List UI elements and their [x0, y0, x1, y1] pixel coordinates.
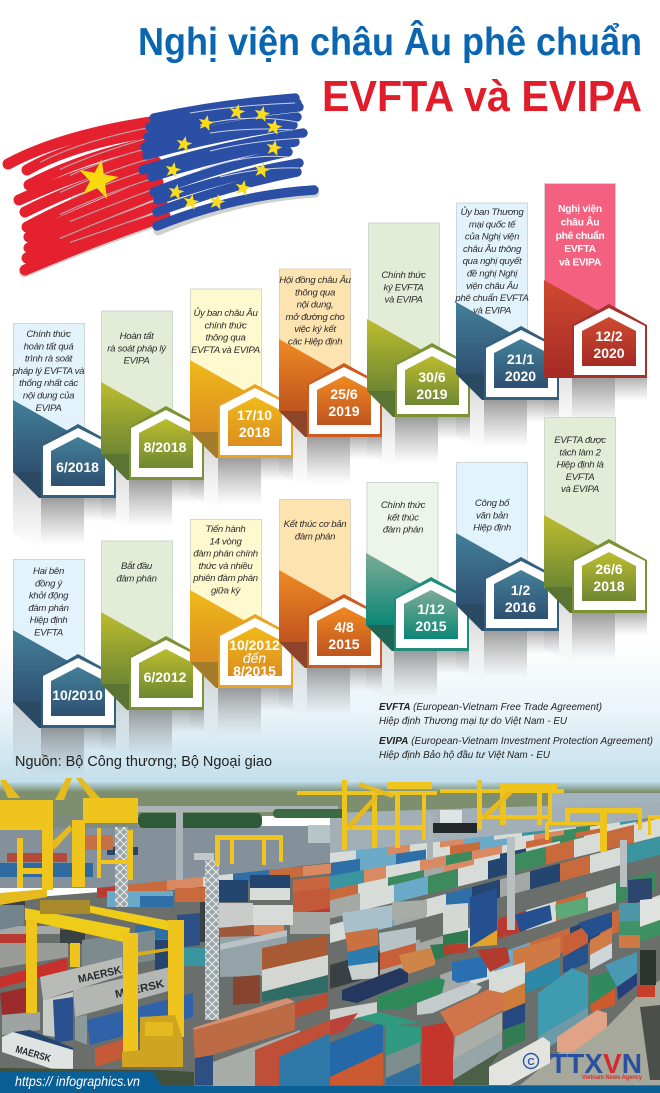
title	[138, 20, 642, 121]
timeline card: 25/6/2019	[279, 269, 382, 437]
card date: 10/2012	[229, 637, 280, 653]
card description: mở đường cho	[286, 312, 345, 323]
TTXVN logo: Vietnam News Agency	[582, 1075, 643, 1081]
card description: phiên đàm phán	[192, 573, 258, 584]
card date: 2015	[415, 618, 447, 634]
MAERSK containers: MAERSK	[14, 1044, 52, 1065]
timeline card: 1/2/2016	[456, 462, 559, 631]
card house badge	[307, 363, 382, 437]
card date: 2015	[328, 636, 360, 652]
card description: EVFTA được	[554, 435, 606, 446]
card description: nội dung của	[23, 390, 74, 402]
card description: và EVIPA	[473, 305, 511, 316]
timeline card: 8/2018	[101, 311, 204, 480]
timeline card: 1/12/2015	[366, 482, 469, 651]
card description: thông qua	[295, 287, 335, 298]
card date: 2016	[505, 599, 536, 615]
card description: các Hiệp định	[288, 336, 342, 348]
title line 2: EVFTA và EVIPA	[322, 72, 642, 121]
card house badge	[41, 654, 116, 728]
card date: 6/2012	[144, 669, 187, 685]
card date: 2020	[593, 345, 625, 361]
timeline card: 6/2012	[101, 541, 204, 710]
container yard base	[0, 826, 660, 1086]
card date: 25/6	[330, 386, 358, 402]
blue brushstrokes	[143, 98, 314, 226]
card description: EVFTA	[34, 628, 63, 638]
card house badge	[41, 424, 116, 498]
card house badge	[572, 304, 647, 378]
card date: 2018	[593, 578, 625, 594]
card house badge	[129, 406, 204, 480]
foreground gantry crane	[25, 900, 184, 1067]
card ribbon	[13, 630, 84, 728]
card description: và EVIPA	[559, 258, 602, 269]
card description: Ủy ban Thương	[461, 206, 524, 218]
timeline card: 10/2010	[13, 560, 116, 728]
timeline card: 26/6/2018	[544, 418, 647, 613]
upper left crane	[0, 778, 138, 905]
photo: container port	[0, 778, 660, 1086]
card description: 14 vòng	[209, 536, 242, 547]
card date: 12/2	[595, 328, 623, 344]
background container rows	[0, 816, 660, 997]
red brushstrokes	[8, 122, 165, 270]
card ribbon	[279, 339, 350, 437]
card description: Hiệp định	[30, 615, 67, 626]
timeline card: 30/6/2019	[367, 223, 470, 417]
footer bar with website	[0, 1072, 660, 1093]
card date: 1/12	[417, 601, 445, 617]
card ribbon	[544, 280, 615, 378]
card date: 8/2015	[233, 663, 276, 679]
source note: Nguồn: Bộ Công thương; Bộ Ngoại giao	[15, 753, 272, 770]
card description: đàm phán	[28, 603, 69, 614]
card description: EVFTA	[564, 244, 597, 255]
card description: châu Âu thông	[463, 244, 522, 255]
legend: abbreviations: Hiệp định Bảo hộ đầu tư Việt Nam - EU	[379, 749, 550, 761]
timeline card: 4/8/2015	[279, 500, 382, 668]
timeline card: 17/10/2018	[190, 289, 293, 458]
card description: kết thúc	[387, 512, 419, 523]
card house badge	[395, 343, 470, 417]
card ribbon	[366, 553, 437, 651]
card ribbon	[101, 382, 172, 480]
card date: 8/2018	[144, 439, 187, 455]
card description: nội dung,	[297, 300, 333, 311]
card date: 4/8	[334, 619, 354, 635]
card description: và EVIPA	[385, 295, 422, 306]
card description: thức và nhiều	[199, 561, 253, 572]
timeline card: 12/2/2020 highlighted	[544, 184, 647, 378]
card ribbon	[190, 590, 261, 688]
card description: đàm phán	[383, 525, 423, 536]
card description: Hiệp định là	[556, 460, 604, 471]
foreground containers	[193, 950, 660, 1086]
MAERSK containers: MAERSK	[114, 978, 165, 1001]
card ribbon	[190, 360, 261, 458]
card description: Hiệp định	[473, 523, 511, 534]
yellow cranes	[0, 778, 660, 1067]
card description: tách làm 2	[559, 447, 602, 458]
dark ground and grass	[0, 1068, 194, 1086]
card house badge	[484, 557, 559, 631]
legend: abbreviations	[379, 701, 653, 761]
page background	[0, 640, 660, 800]
card house badge	[218, 614, 293, 688]
card description: Tiến hành	[206, 524, 245, 535]
card description: Chính thức	[381, 500, 426, 511]
card house badge	[572, 539, 647, 613]
card description: mại quốc tế	[469, 219, 516, 230]
card description: Nghị viện	[558, 204, 602, 215]
card description: châu Âu	[561, 215, 599, 228]
card description: việc ký kết	[294, 324, 336, 335]
MAERSK containers: MAERSK	[77, 964, 123, 986]
card ribbon	[13, 400, 84, 498]
card date: 10/2010	[52, 687, 103, 703]
card description: Chính thức	[381, 270, 426, 281]
card description: đề nghị Nghị	[467, 268, 518, 280]
card description: giữa kỳ	[211, 586, 242, 596]
card description: EVIPA	[35, 403, 62, 414]
card description: đồng ý	[35, 578, 64, 589]
card description: văn bản	[476, 510, 508, 521]
legend: abbreviations: EVIPA (European-Vietnam Investment Protection Agreement)	[379, 735, 653, 747]
lattice lighting towers	[115, 812, 627, 1020]
card description: Hai bên	[33, 566, 64, 577]
mid yard containers	[0, 878, 660, 1024]
timeline card: 10/2012 to 8/2015	[190, 520, 293, 688]
card date: 2020	[505, 368, 536, 384]
card ribbon	[101, 612, 172, 710]
icon: yellow star of Vietnam flag	[80, 159, 119, 199]
card date: 1/2	[511, 582, 530, 598]
card description: EVFTA và EVIPA	[191, 345, 260, 356]
card house badge	[394, 577, 469, 651]
card ribbon	[544, 515, 615, 613]
card description: EVIPA	[123, 356, 150, 367]
timeline card: 21/1/2020	[454, 203, 559, 400]
shadows under timeline cards	[13, 352, 647, 779]
card description: Chính thức	[26, 329, 71, 340]
card date: 26/6	[595, 561, 623, 577]
MAERSK containers	[2, 957, 193, 1070]
card description: đàm phán chính	[193, 549, 258, 560]
card description: Bắt đầu	[121, 561, 153, 572]
card description: đàm phán	[295, 531, 335, 542]
card ribbon	[456, 533, 527, 631]
card description: thông qua	[206, 333, 245, 344]
card description: Hội đồng châu Âu	[279, 275, 352, 286]
card description: ký EVFTA	[383, 282, 424, 293]
card description: viện châu Âu	[466, 281, 519, 292]
card description: Kết thúc cơ bản	[284, 519, 346, 530]
card description: thống nhất các	[19, 378, 78, 389]
left yard rows	[0, 863, 331, 970]
card description: trình rà soát	[25, 354, 73, 365]
card description: chính thức	[204, 320, 247, 331]
card date: đến	[243, 650, 266, 666]
land and water	[0, 782, 660, 888]
card date: 2019	[416, 386, 448, 402]
card ribbon	[456, 302, 527, 400]
TTXVN logo: TTXVN	[550, 1048, 642, 1079]
card date: 2019	[328, 403, 360, 419]
card description: và EVIPA	[561, 484, 599, 495]
card description: Công bố	[475, 498, 511, 509]
card date: 30/6	[418, 369, 446, 385]
card description: phê chuẩn EVFTA	[454, 293, 529, 304]
card description: phê chuẩn	[556, 230, 604, 242]
card house badge	[129, 636, 204, 710]
card date: 21/1	[507, 351, 534, 367]
TTXVN logo: C	[527, 1057, 535, 1068]
legend: abbreviations: EVFTA (European-Vietnam Free Trade Agreement)	[379, 701, 602, 713]
card date: 6/2018	[56, 459, 99, 475]
website address: https:// infographics.vn	[15, 1073, 140, 1089]
right quay cranes	[297, 780, 660, 852]
icon: Vietnam and EU brushstroke flag	[8, 98, 315, 273]
card description: hoàn tất quá	[24, 341, 74, 352]
legend: abbreviations: Hiệp định Thương mại tự do Việt Nam - EU	[379, 715, 567, 727]
card description: Ủy ban châu Âu	[193, 307, 258, 319]
card description: pháp lý EVFTA và	[12, 366, 85, 377]
card house badge	[307, 594, 382, 668]
far ships	[0, 810, 477, 877]
timeline card: 6/2018	[12, 324, 116, 498]
card ribbon	[279, 570, 350, 668]
card description: rà soát pháp lý	[107, 343, 167, 354]
card ribbon	[367, 319, 438, 417]
card description: EVFTA	[566, 472, 594, 483]
card house badge	[484, 326, 559, 400]
card description: của Nghị viện	[465, 232, 519, 243]
card date: 17/10	[237, 407, 272, 423]
card description: Hoàn tất	[120, 331, 154, 342]
card house badge	[218, 384, 293, 458]
icon: EU stars	[164, 103, 283, 211]
card description: đàm phán	[116, 573, 157, 584]
card date: 2018	[239, 424, 270, 440]
card description: khởi động	[29, 591, 69, 602]
card description: qua nghị quyết	[463, 256, 522, 267]
low gantry crane	[215, 835, 283, 865]
